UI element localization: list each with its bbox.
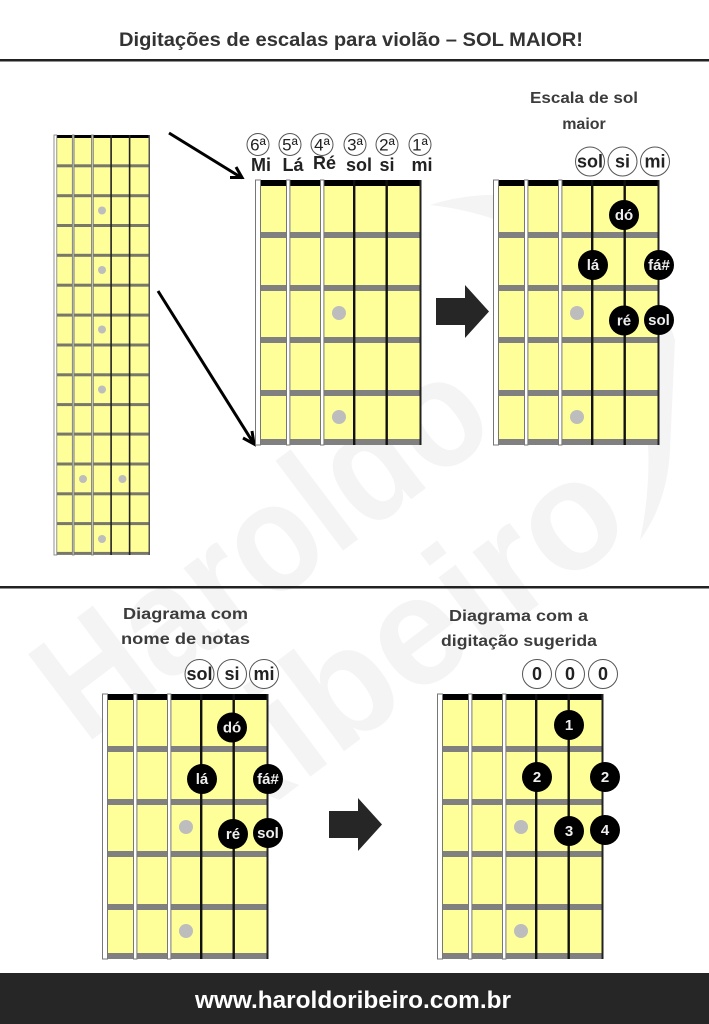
fingers: 2 (601, 769, 609, 786)
fingers: 1 (565, 717, 573, 734)
open strings (522, 660, 618, 688)
notes: ré (226, 826, 240, 843)
notes: dó (615, 207, 633, 224)
open strings: si (615, 152, 630, 172)
notes: lá (196, 771, 209, 788)
string names: sol (346, 155, 372, 175)
notes (187, 712, 283, 849)
string number 2 (376, 134, 398, 156)
notes: lá (587, 257, 600, 274)
heading: Escala de sol maior (530, 90, 638, 133)
string number 2: 2ª (379, 136, 396, 154)
heading: Diagrama com a digitação sugerida (441, 608, 597, 650)
open strings (576, 147, 670, 176)
title: Digitações de escalas para violão – SOL MAIOR! (119, 30, 583, 51)
string labels (247, 134, 433, 175)
notes: fá# (648, 257, 670, 274)
open strings: sol (577, 152, 603, 172)
section rule (0, 586, 709, 588)
scale diagram (493, 147, 674, 445)
open strings: si (224, 664, 240, 684)
open strings: 0 (598, 664, 608, 684)
heading: Diagrama com nome de notas: Diagrama com (123, 606, 248, 623)
heading: Diagrama com a digitação sugerida: digitação sugerida (441, 633, 597, 650)
string names: mi (411, 155, 433, 175)
open strings: sol (186, 664, 213, 684)
fingers: 4 (601, 822, 610, 839)
fingers (522, 710, 620, 846)
string number 6: 6ª (250, 136, 267, 154)
watermark: Haroldo (1, 320, 520, 771)
open strings: 0 (532, 664, 542, 684)
watermark: Ribeiro (129, 419, 656, 876)
string number 1 (409, 134, 431, 156)
string names: si (379, 155, 395, 175)
string number 3 (344, 134, 366, 156)
heading: Escala de sol maior: Escala de sol (530, 90, 638, 107)
string number 5 (279, 134, 301, 156)
string number 5: 5ª (282, 136, 299, 154)
block arrow 1 (436, 285, 489, 338)
block arrow 2 (329, 798, 382, 851)
string names: Lá (282, 155, 304, 175)
notes: fá# (257, 771, 279, 788)
heading: Escala de sol maior: maior (562, 116, 606, 133)
string names: Mi (251, 155, 271, 175)
string number 1: 1ª (412, 136, 429, 154)
footer bar (0, 973, 709, 1024)
notes: sol (648, 312, 670, 329)
string number 6 (247, 134, 269, 156)
notes: ré (617, 312, 631, 330)
watermark (1, 195, 675, 876)
notes: dó (223, 720, 241, 736)
open strings (185, 660, 278, 688)
open strings: 0 (565, 664, 575, 684)
fingers: 3 (565, 823, 573, 840)
string number 4: 4ª (314, 136, 331, 154)
full fretboard neck (54, 135, 150, 555)
heading: Diagrama com nome de notas: nome de notas (121, 631, 250, 648)
heading: Diagrama com a digitação sugerida: Diagrama com a (449, 608, 588, 625)
title rule (0, 59, 709, 62)
notes: sol (257, 825, 279, 842)
fingering diagram (437, 660, 620, 959)
heading: Diagrama com nome de notas (121, 606, 250, 648)
string number 3: 3ª (347, 136, 364, 154)
string names (251, 153, 433, 175)
notes (578, 200, 674, 336)
open strings: mi (253, 664, 275, 684)
fingers: 2 (533, 769, 541, 786)
string names: Ré (313, 153, 336, 173)
string number 4 (311, 134, 333, 156)
arrow: to nut of detail neck (169, 133, 242, 178)
open strings: mi (644, 152, 666, 172)
arrow: to bottom of detail neck (158, 291, 254, 444)
detail neck (255, 180, 422, 445)
note name diagram (102, 660, 283, 959)
website: www.haroldoribeiro.com.br (194, 987, 511, 1014)
